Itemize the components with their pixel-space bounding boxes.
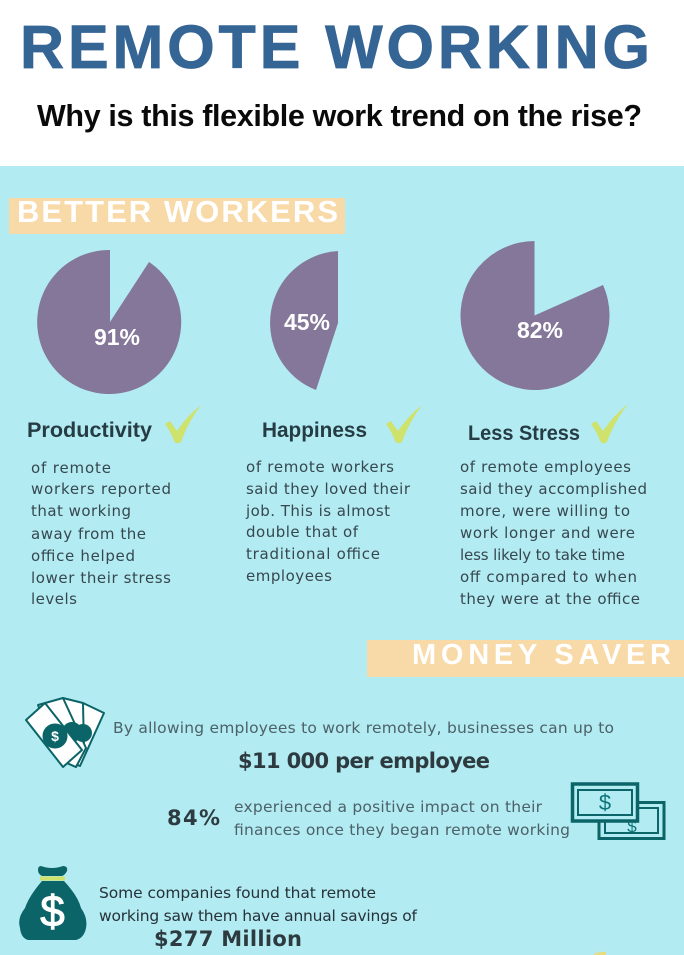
text: 84% finances: 84% <box>167 806 220 830</box>
text: less stress description: of remote employees <box>460 458 631 476</box>
pie chart: 82%: 82% <box>517 317 563 343</box>
text: happiness description: employees <box>246 567 332 585</box>
text: productivity description: of remote <box>31 459 111 477</box>
text: happiness description: traditional office <box>246 545 380 563</box>
text: happiness description: said they loved their <box>246 480 411 498</box>
icon: two banknotes: $ <box>627 817 637 836</box>
text: less stress description: more, were willing to <box>460 502 630 520</box>
text: less stress description: work longer and were <box>460 524 635 542</box>
text: less stress description: off compared to when <box>460 568 637 586</box>
text: employee savings <box>113 719 614 773</box>
heading: money saver <box>367 639 684 677</box>
text: 84% finances: finances once they began remote working <box>234 821 570 839</box>
text: annual savings: working saw them have annual savings of <box>99 907 418 925</box>
icon: money bag: $ <box>40 887 65 936</box>
text: annual savings <box>99 884 418 951</box>
text: happiness description: double that of <box>246 523 359 541</box>
heading: less stress: Less Stress <box>468 422 580 445</box>
icon: fanned banknotes <box>26 698 104 767</box>
title: REMOTE WORKING <box>20 13 650 81</box>
icon: check mark <box>386 405 422 443</box>
text: productivity description: that working <box>31 502 131 520</box>
text: 84% finances <box>167 798 570 839</box>
icon: cropped yellow shape <box>593 952 606 955</box>
pie chart: 45%: 45% <box>284 309 330 335</box>
pie chart: 82% <box>461 241 610 390</box>
text: employee savings: $11 000 per employee <box>238 749 490 773</box>
icon: check mark <box>165 405 201 443</box>
icon: two banknotes <box>572 784 664 838</box>
icon: check mark <box>591 404 628 443</box>
text: annual savings: $277 Million <box>154 927 302 951</box>
text: productivity description: lower their stress <box>31 569 171 587</box>
subtitle: Why is this flexible work trend on the rise? <box>37 99 642 133</box>
pie chart: 45% <box>270 251 338 390</box>
icon: money bag <box>19 866 86 940</box>
icon: two banknotes: $ <box>599 790 611 815</box>
text: productivity description: workers reported <box>31 480 171 498</box>
icon: fanned banknotes: $ <box>51 728 59 744</box>
text: productivity description: levels <box>31 590 77 608</box>
text: annual savings: Some companies found that remote <box>99 884 376 902</box>
text: happiness description: of remote workers <box>246 458 394 476</box>
heading: happiness: Happiness <box>262 419 367 442</box>
text: less stress description: less likely to take time <box>460 546 625 564</box>
heading: better workers: BETTER WORKERS <box>17 194 338 229</box>
text: employee savings: By allowing employees to work remotely, businesses can up to <box>113 719 614 737</box>
heading: productivity: Productivity <box>27 419 152 442</box>
panel: happiness <box>245 251 422 585</box>
text: productivity description: away from the <box>31 525 146 543</box>
text: less stress description: they were at the office <box>460 590 640 608</box>
pie chart: 91% <box>37 250 181 394</box>
text: productivity description: office helped <box>31 547 135 565</box>
text: 84% finances: experienced a positive impact on their <box>234 798 543 816</box>
text: happiness description: job. This is almost <box>245 502 390 520</box>
pie chart: 91%: 91% <box>94 324 140 350</box>
panel: productivity <box>27 250 201 608</box>
panel: less stress <box>460 241 647 608</box>
heading: money saver: MONEY SAVER <box>412 639 671 671</box>
text: less stress description: said they accomplished <box>460 480 647 498</box>
